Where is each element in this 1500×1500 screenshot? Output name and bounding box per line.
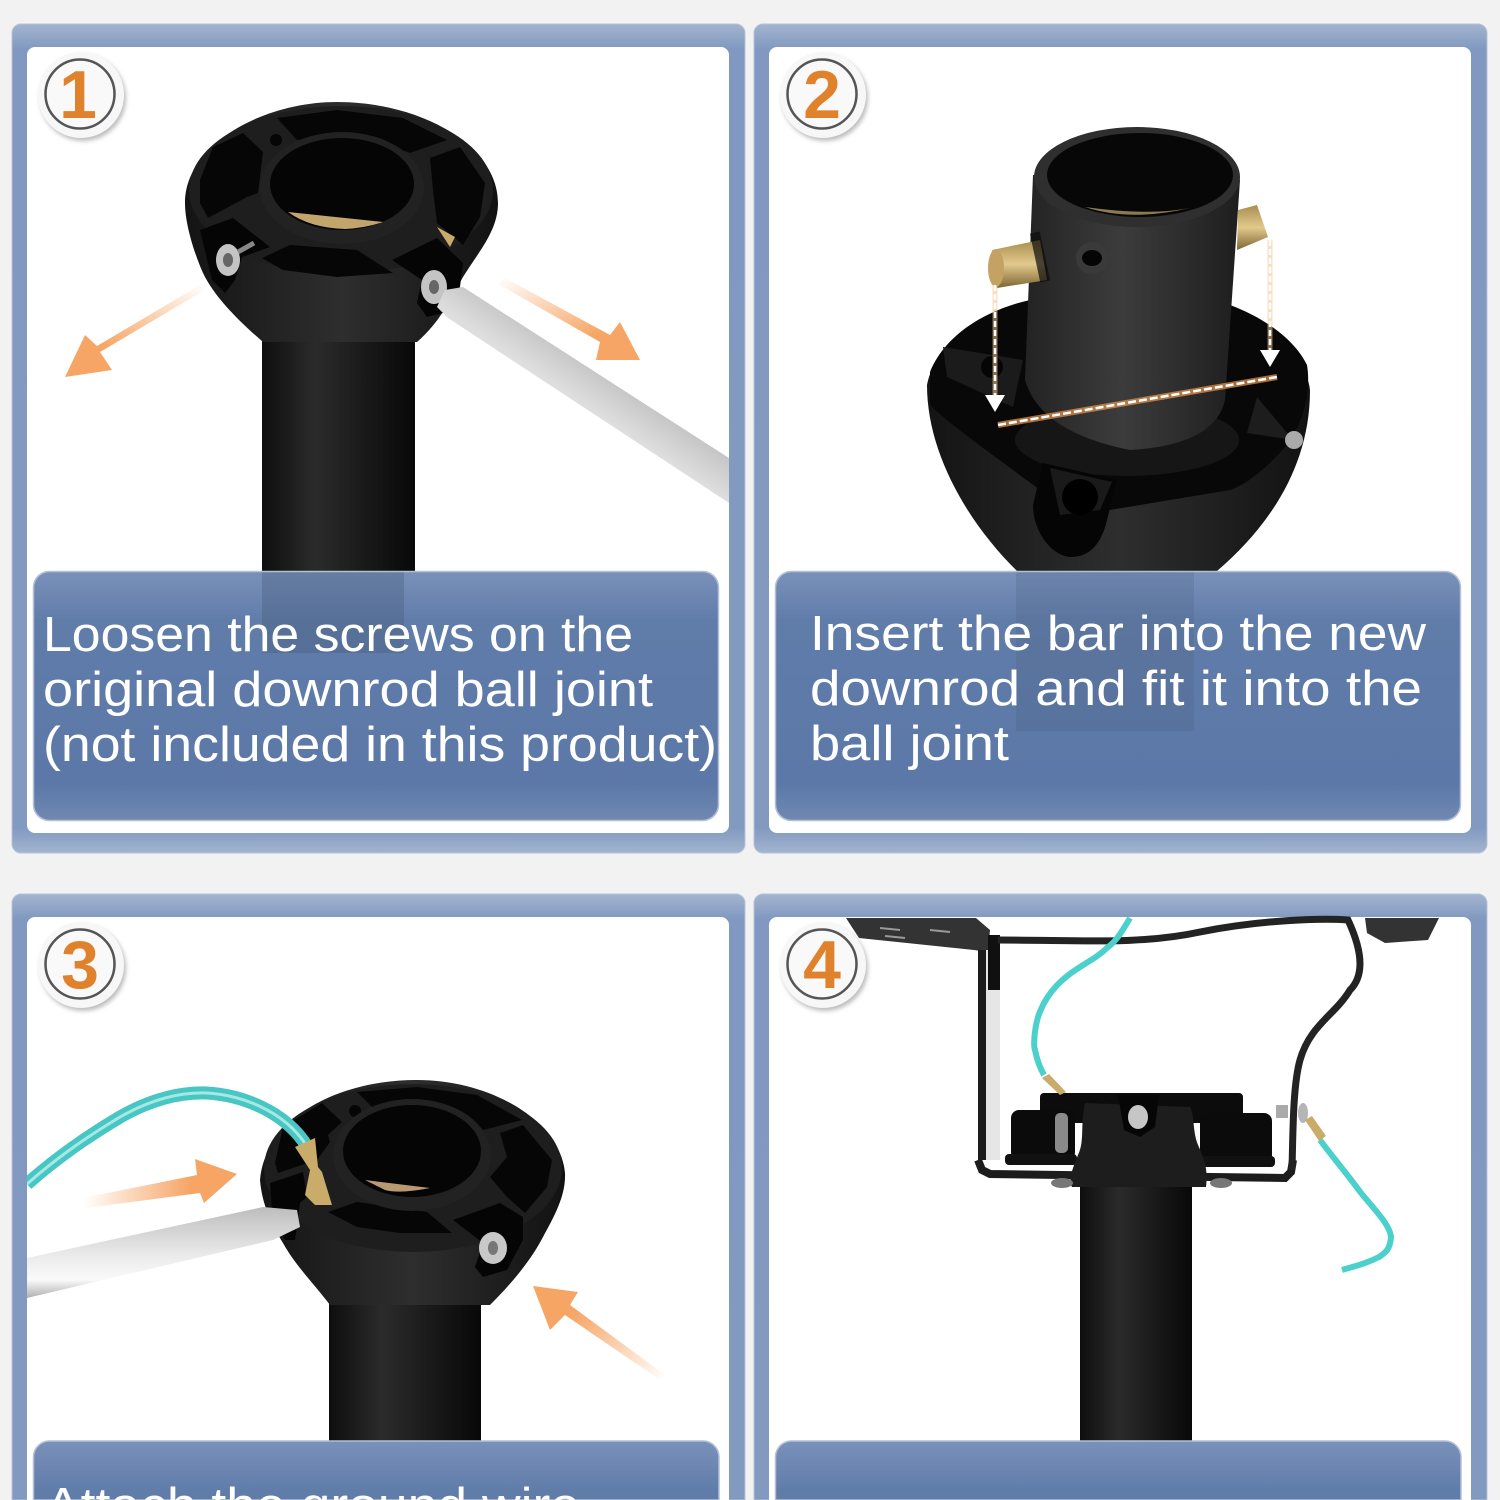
- icon: mounting bracket: [846, 918, 1439, 1178]
- badge: number 1: 1: [59, 57, 97, 133]
- photo: downrod with screwdriver loosening screws: [65, 102, 729, 571]
- caption box: step 1: [33, 571, 719, 821]
- icon: right brass pin: [1237, 205, 1268, 250]
- badge: number 2: 2: [803, 57, 841, 133]
- icon: teal ground wires: [1034, 918, 1391, 1270]
- badge: number 4: [780, 922, 868, 1011]
- badge: number 1: [38, 52, 126, 141]
- badge: number 2: [780, 52, 868, 141]
- icon: left brass pin: [988, 232, 1050, 288]
- arrow: pointing right to screw: [83, 1159, 237, 1208]
- arrow: dashed right guide: [1260, 240, 1280, 367]
- caption box: step 3: [34, 1441, 719, 1500]
- caption text: step 2: Insert the bar into the new: [810, 607, 1427, 661]
- icon: brass terminal: [295, 1138, 332, 1205]
- photo: attaching ground wire to ball joint: [27, 1080, 665, 1441]
- caption text: step 1: Loosen the screws on the: [43, 608, 633, 662]
- panel: step 4: [754, 894, 1487, 1500]
- icon: screwdriver: [437, 287, 729, 503]
- caption text: step 2: downrod and fit it into the: [810, 662, 1422, 716]
- icon: teal ground wire: [27, 1093, 308, 1184]
- photo: bar inserted into downrod and ball joint: [927, 127, 1310, 571]
- panel: step 1: [12, 24, 745, 853]
- caption text: step 2: [810, 607, 1427, 771]
- arrow: left outward: [65, 285, 205, 377]
- panel: step 3: [12, 894, 745, 1500]
- caption text: step 1: original downrod ball joint: [43, 663, 653, 717]
- caption box: step 2: [775, 571, 1461, 821]
- panel: step 2: [754, 24, 1487, 853]
- arrow: dashed left guide: [985, 285, 1005, 412]
- badge: number 3: 3: [61, 927, 99, 1003]
- icon: screwdriver: [27, 1207, 300, 1298]
- arrow: right outward: [498, 278, 640, 360]
- badge: number 3: [38, 922, 126, 1011]
- badge: number 4: 4: [803, 927, 841, 1003]
- caption box: step 4: [776, 1441, 1461, 1500]
- caption text: step 1: [43, 608, 717, 772]
- photo: assembled downrod with mounting bracket: [846, 918, 1439, 1441]
- caption text: step 1: (not included in this product): [43, 718, 717, 772]
- caption text: step 2: ball joint: [810, 717, 1009, 771]
- arrow: pointing up-left to screw: [533, 1286, 665, 1380]
